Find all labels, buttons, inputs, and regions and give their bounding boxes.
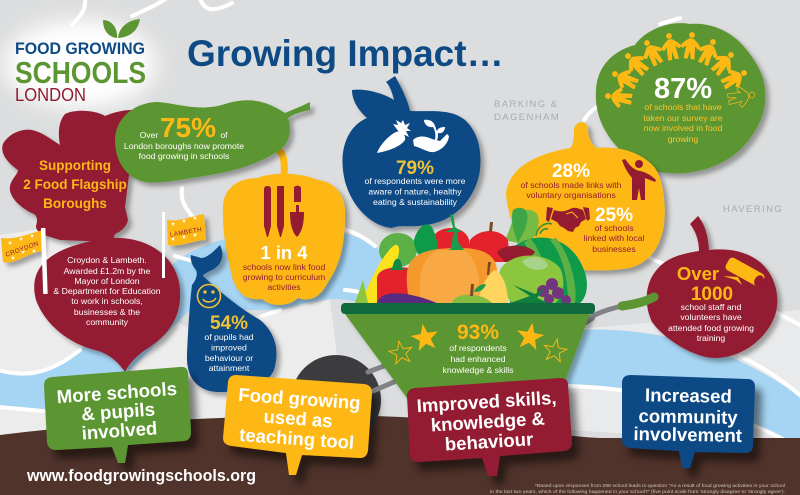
panel: orange pumpkin, links: of schools <box>594 223 634 233</box>
flag: Croydon <box>1 228 48 294</box>
icon: ring of people <box>604 31 757 110</box>
panel: maroon tomato, 1000 staff: training <box>697 333 725 343</box>
panel: green circle, 87 percent: taken our survey are <box>643 113 723 123</box>
footnote: in the last two years, which of the following happened in your school?" (five point scale from 'strongly disagree to 'strongly agree'). <box>490 489 785 494</box>
callout: food growing as teaching tool <box>223 375 372 475</box>
flag: Lambeth: LAMBETH <box>170 226 203 239</box>
callout: more schools and pupils <box>44 367 191 463</box>
icon: wheel <box>291 355 381 445</box>
icon: carrot <box>377 120 411 153</box>
wheelbarrow with vegetables: knowledge & skills <box>443 365 514 375</box>
panel: beetroot, Croydon and Lambeth <box>34 238 180 372</box>
panel: navy pear, 54 percent: attainment <box>209 363 250 373</box>
panel: beetroot, Croydon and Lambeth: Croydon & Lambeth. <box>67 255 147 265</box>
flag: Croydon: CROYDON <box>5 240 40 259</box>
wheelbarrow with vegetables <box>291 208 654 445</box>
panel: orange pumpkin, links: of schools made links with <box>521 180 622 190</box>
panel: green aubergine, 75 percent <box>115 100 310 183</box>
callout: improved skills: knowledge & <box>430 408 545 435</box>
logo: LONDON <box>15 85 86 105</box>
icon: pens and trowel <box>264 186 304 237</box>
panel: orange pumpkin, links: 28% <box>552 161 590 182</box>
map label: Dagenham: DAGENHAM <box>494 112 560 123</box>
icon: stars <box>388 320 568 365</box>
panel: beetroot, Croydon and Lambeth: businesses & the <box>74 307 140 317</box>
wheelbarrow with vegetables: 93% <box>457 321 499 344</box>
panel: yellow pepper, curriculum <box>223 149 345 305</box>
wheelbarrow with vegetables: had enhanced <box>450 354 506 364</box>
panel: orange pumpkin, links: businesses <box>592 244 636 254</box>
flag: Lambeth <box>162 212 206 278</box>
callout: increased community involvement: community <box>638 405 738 428</box>
panel: beet leaf, supporting boroughs: 2 Food Flagship <box>23 177 127 192</box>
barrow rim <box>341 303 595 314</box>
icon: handshake <box>546 207 590 232</box>
logo: FOOD GROWING <box>15 39 145 58</box>
panel: beetroot, Croydon and Lambeth: & Department for Education <box>53 286 161 296</box>
icon: hand with seedling <box>413 120 449 152</box>
callout: increased community involvement: Increased <box>645 384 732 407</box>
panel: yellow pepper, curriculum: growing to curriculum <box>243 272 325 282</box>
callout: food growing as teaching tool: teaching tool <box>239 424 355 453</box>
panel: navy apple, 79 percent: of respondents were more <box>365 176 466 186</box>
panel: green aubergine, 75 percent: of <box>220 130 228 140</box>
barrow body <box>345 314 590 405</box>
panel: yellow pepper, curriculum: schools now link food <box>243 262 325 272</box>
map labels: Barking & Dagenham: BARKING & <box>494 99 558 110</box>
wheelbarrow with vegetables: of respondents <box>449 343 507 353</box>
panel: orange pumpkin, links <box>506 122 665 270</box>
panel: orange pumpkin, links: linked with local <box>584 233 644 243</box>
handles <box>368 306 622 391</box>
soil ground <box>0 416 800 495</box>
callout: improved skills: Improved skills, <box>416 387 557 416</box>
panel: maroon tomato, 1000 staff <box>647 216 777 358</box>
panel: green circle, 87 percent: of schools that have <box>644 102 722 112</box>
panel: beet leaf, supporting boroughs: Supporting <box>39 158 111 173</box>
vegetables <box>355 208 587 305</box>
panel: beetroot, Croydon and Lambeth: community <box>86 317 129 327</box>
logo <box>4 19 156 108</box>
panel: maroon tomato, 1000 staff: attended food growing <box>668 323 754 333</box>
panel: navy apple, 79 percent <box>342 76 480 228</box>
panel: yellow pepper, curriculum: 1 in 4 <box>260 242 308 263</box>
icon: logo leaves <box>103 19 140 38</box>
panel: green circle, 87 percent: 87% <box>654 73 712 105</box>
callout: more schools and pupils: involved <box>81 417 158 444</box>
panel: maroon tomato, 1000 staff: Over <box>677 263 719 284</box>
panel: navy pear, 54 percent: 54% <box>210 313 248 334</box>
panel: green circle, 87 percent <box>596 23 765 173</box>
panel: navy pear, 54 percent <box>187 245 276 392</box>
callout: increased community involvement: involvement <box>633 423 742 446</box>
panel: orange pumpkin, links: 25% <box>595 205 633 226</box>
callout: more schools and pupils: More schools <box>56 378 178 407</box>
panel: green aubergine, 75 percent: Over <box>140 130 158 140</box>
panel: orange pumpkin, links: voluntary organisations <box>526 190 616 200</box>
panel: green aubergine, 75 percent: 75% <box>160 112 216 143</box>
panel: maroon tomato, 1000 staff: volunteers have <box>680 312 742 322</box>
footnote <box>490 483 785 494</box>
icon: person waving <box>622 159 656 200</box>
panel: beet leaf, supporting boroughs <box>2 110 132 242</box>
panel: green aubergine, 75 percent: London boroughs now promote <box>124 141 244 151</box>
website url: www.foodgrowingschools.org <box>26 466 256 485</box>
panel: navy pear, 54 percent: of pupils had <box>204 332 254 342</box>
panel: navy apple, 79 percent: aware of nature, healthy <box>368 186 462 196</box>
footnote: *Based upon responses from 298 school leads to question "As a result of food growing activities in your school <box>535 483 785 488</box>
panel: green circle, 87 percent: now involved in food <box>644 123 723 133</box>
panel: maroon tomato, 1000 staff: school staff and <box>681 302 742 312</box>
panel: yellow pepper, curriculum: activities <box>267 282 301 292</box>
title: Growing Impact… <box>187 33 504 74</box>
panel: green circle, 87 percent: growing <box>668 134 698 144</box>
panel: beetroot, Croydon and Lambeth: Mayor of London <box>74 276 140 286</box>
callout: improved skills <box>407 378 572 476</box>
callout: more schools and pupils: & pupils <box>81 398 156 425</box>
icon: smiley face <box>198 284 220 308</box>
panel: green aubergine, 75 percent: food growing in schools <box>139 151 230 161</box>
river <box>0 228 800 450</box>
logo: SCHOOLS <box>15 55 146 90</box>
panel: beetroot, Croydon and Lambeth: to work in schools, <box>71 296 143 306</box>
handle grip <box>622 297 654 306</box>
callout: improved skills: behaviour <box>444 428 534 455</box>
map label: Havering: HAVERING <box>723 204 783 215</box>
callout: food growing as teaching tool: Food growing <box>238 384 361 413</box>
panel: beetroot, Croydon and Lambeth: Awarded £1.2m by the <box>64 266 151 276</box>
icon: scroll <box>723 256 766 288</box>
panel: navy pear, 54 percent: behaviour or <box>205 353 253 363</box>
callout: increased community involvement <box>622 375 755 468</box>
panel: navy apple, 79 percent: 79% <box>396 158 434 179</box>
callout: food growing as teaching tool: used as <box>263 406 333 431</box>
panel: beet leaf, supporting boroughs: Boroughs <box>43 196 107 211</box>
panel: navy pear, 54 percent: improved <box>211 342 247 352</box>
panel: maroon tomato, 1000 staff: 1000 <box>691 284 733 305</box>
panel: navy apple, 79 percent: eating & sustainability <box>373 197 458 207</box>
